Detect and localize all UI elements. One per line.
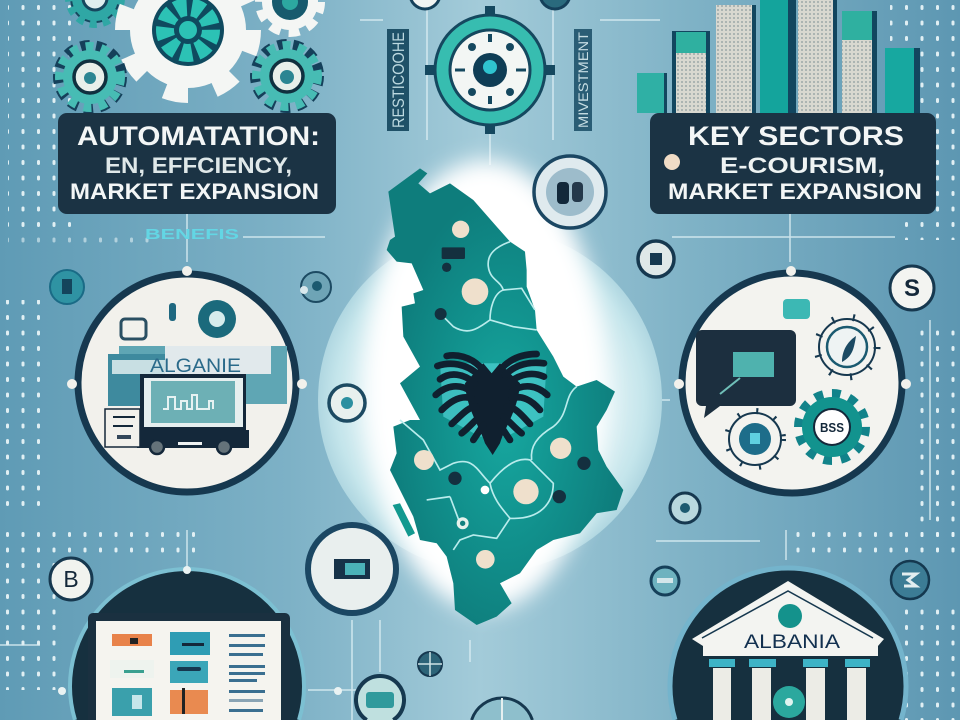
badge: S: S bbox=[904, 275, 920, 302]
panel: automation bbox=[58, 113, 336, 214]
text: efficiency: EN, EFFCIENCY, bbox=[105, 153, 292, 178]
central halo bbox=[318, 160, 662, 610]
gear: mid-right teal bbox=[257, 46, 317, 106]
tablet bbox=[88, 613, 290, 720]
badge: teal small bbox=[651, 567, 679, 595]
panel: bank building circle bbox=[670, 568, 906, 720]
badge: screen bbox=[308, 525, 396, 613]
outline gear bottom bbox=[729, 413, 781, 465]
label: benefits: BENEFIS bbox=[145, 226, 239, 243]
chat bubble bbox=[696, 330, 796, 418]
badge: top-left of right circle bbox=[638, 241, 674, 277]
gear: large white bbox=[128, 0, 248, 90]
gears cluster bbox=[60, 0, 318, 107]
map pins bbox=[414, 221, 571, 569]
bullet bbox=[664, 154, 680, 170]
side strip left: RESTICOOHE bbox=[389, 32, 408, 128]
gear: top-left small bbox=[69, 0, 121, 24]
badge: small right bbox=[670, 493, 700, 523]
panel: key sectors bbox=[650, 113, 936, 214]
badge: mid-left bbox=[329, 385, 365, 421]
building sign bbox=[119, 346, 287, 404]
gear: top-right white bbox=[262, 0, 318, 30]
badge: globe bottom bbox=[472, 698, 532, 720]
side strip right: MIVESTMENT bbox=[575, 32, 591, 128]
icon: top small circles bbox=[410, 0, 570, 9]
bss label: BSS bbox=[820, 420, 844, 435]
island bbox=[393, 503, 415, 537]
panel: circle gears and chat bbox=[674, 266, 911, 493]
pediment bbox=[692, 581, 884, 656]
badge: lower-left small bbox=[356, 676, 404, 720]
badge: B bbox=[50, 558, 92, 600]
heading: automation: AUTOMATATION: bbox=[77, 121, 320, 151]
teal gear bss bbox=[801, 396, 863, 458]
badge: teal K bbox=[50, 270, 84, 304]
outline gear top bbox=[819, 319, 875, 375]
badge: arrow bbox=[891, 561, 929, 599]
panel: dashboard circle bbox=[58, 566, 342, 720]
badge: outline bbox=[300, 272, 331, 302]
badge: S bbox=[890, 266, 934, 310]
icon: target dial bbox=[425, 6, 555, 134]
region borders bbox=[400, 242, 577, 550]
gear: mid-left teal bbox=[60, 47, 120, 107]
icon: circle near map right bbox=[534, 156, 606, 228]
columns bbox=[709, 659, 870, 720]
heading: key sectors: KEY SECTORS bbox=[688, 121, 904, 151]
laptop bbox=[140, 374, 246, 436]
sign text: ALGANIE bbox=[150, 356, 241, 377]
eagle emblem bbox=[436, 354, 547, 455]
panel: circle albanie storefront bbox=[67, 266, 307, 492]
badge: B: B bbox=[63, 566, 79, 592]
small icons bbox=[121, 319, 146, 339]
Albania map bbox=[387, 168, 623, 625]
text: e-commerce: E-COURISM, bbox=[720, 153, 885, 178]
text: market expansion: MARKET EXPANSION bbox=[70, 179, 319, 204]
bar chart bbox=[637, 0, 920, 113]
albania label: ALBANIA bbox=[744, 632, 840, 653]
text: market expansion: MARKET EXPANSION bbox=[668, 179, 922, 204]
badge: globe bbox=[418, 652, 442, 676]
